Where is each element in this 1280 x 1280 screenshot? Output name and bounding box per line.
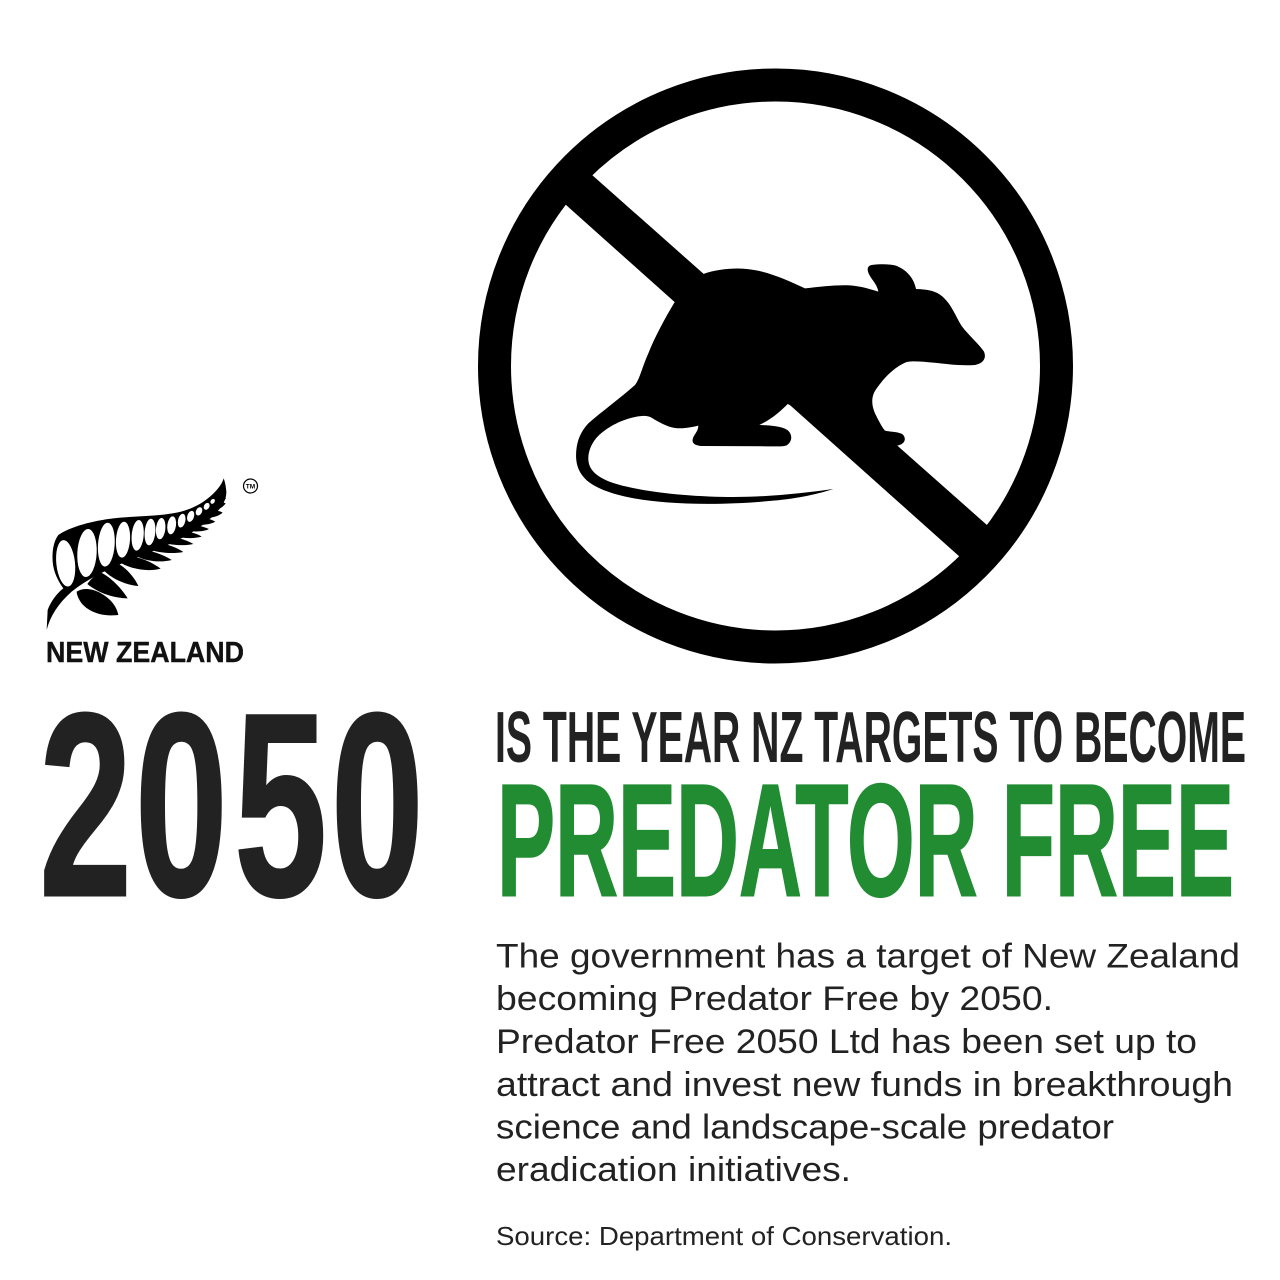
white frond ovals bbox=[54, 498, 216, 588]
lower leaflets bbox=[77, 497, 226, 615]
body paragraph: Predator Free 2050 Ltd has been set up to bbox=[496, 1023, 1197, 1061]
big year 2050: 2050 bbox=[39, 658, 424, 951]
body paragraph: The government has a target of New Zealand bbox=[496, 938, 1240, 976]
body paragraph bbox=[496, 938, 1240, 1189]
trademark symbol: TM bbox=[246, 484, 255, 490]
logo: New Zealand fern mark bbox=[46, 478, 258, 669]
logo wordmark: NEW ZEALAND bbox=[46, 637, 244, 669]
prohibition ring bbox=[494, 85, 1056, 647]
body paragraph: eradication initiatives. bbox=[496, 1151, 851, 1189]
source note: Source: Department of Conservation. bbox=[496, 1221, 952, 1251]
trademark symbol bbox=[244, 479, 258, 493]
body paragraph: attract and invest new funds in breakthrough bbox=[496, 1066, 1233, 1104]
body paragraph: becoming Predator Free by 2050. bbox=[496, 980, 1053, 1018]
upper frond with stem bbox=[47, 478, 226, 630]
prohibition slash bbox=[558, 168, 994, 564]
body paragraph: science and landscape-scale predator bbox=[496, 1108, 1114, 1146]
icon: no-rat prohibition sign bbox=[494, 85, 1056, 647]
fern icon bbox=[47, 478, 226, 630]
rat silhouette bbox=[576, 264, 985, 504]
